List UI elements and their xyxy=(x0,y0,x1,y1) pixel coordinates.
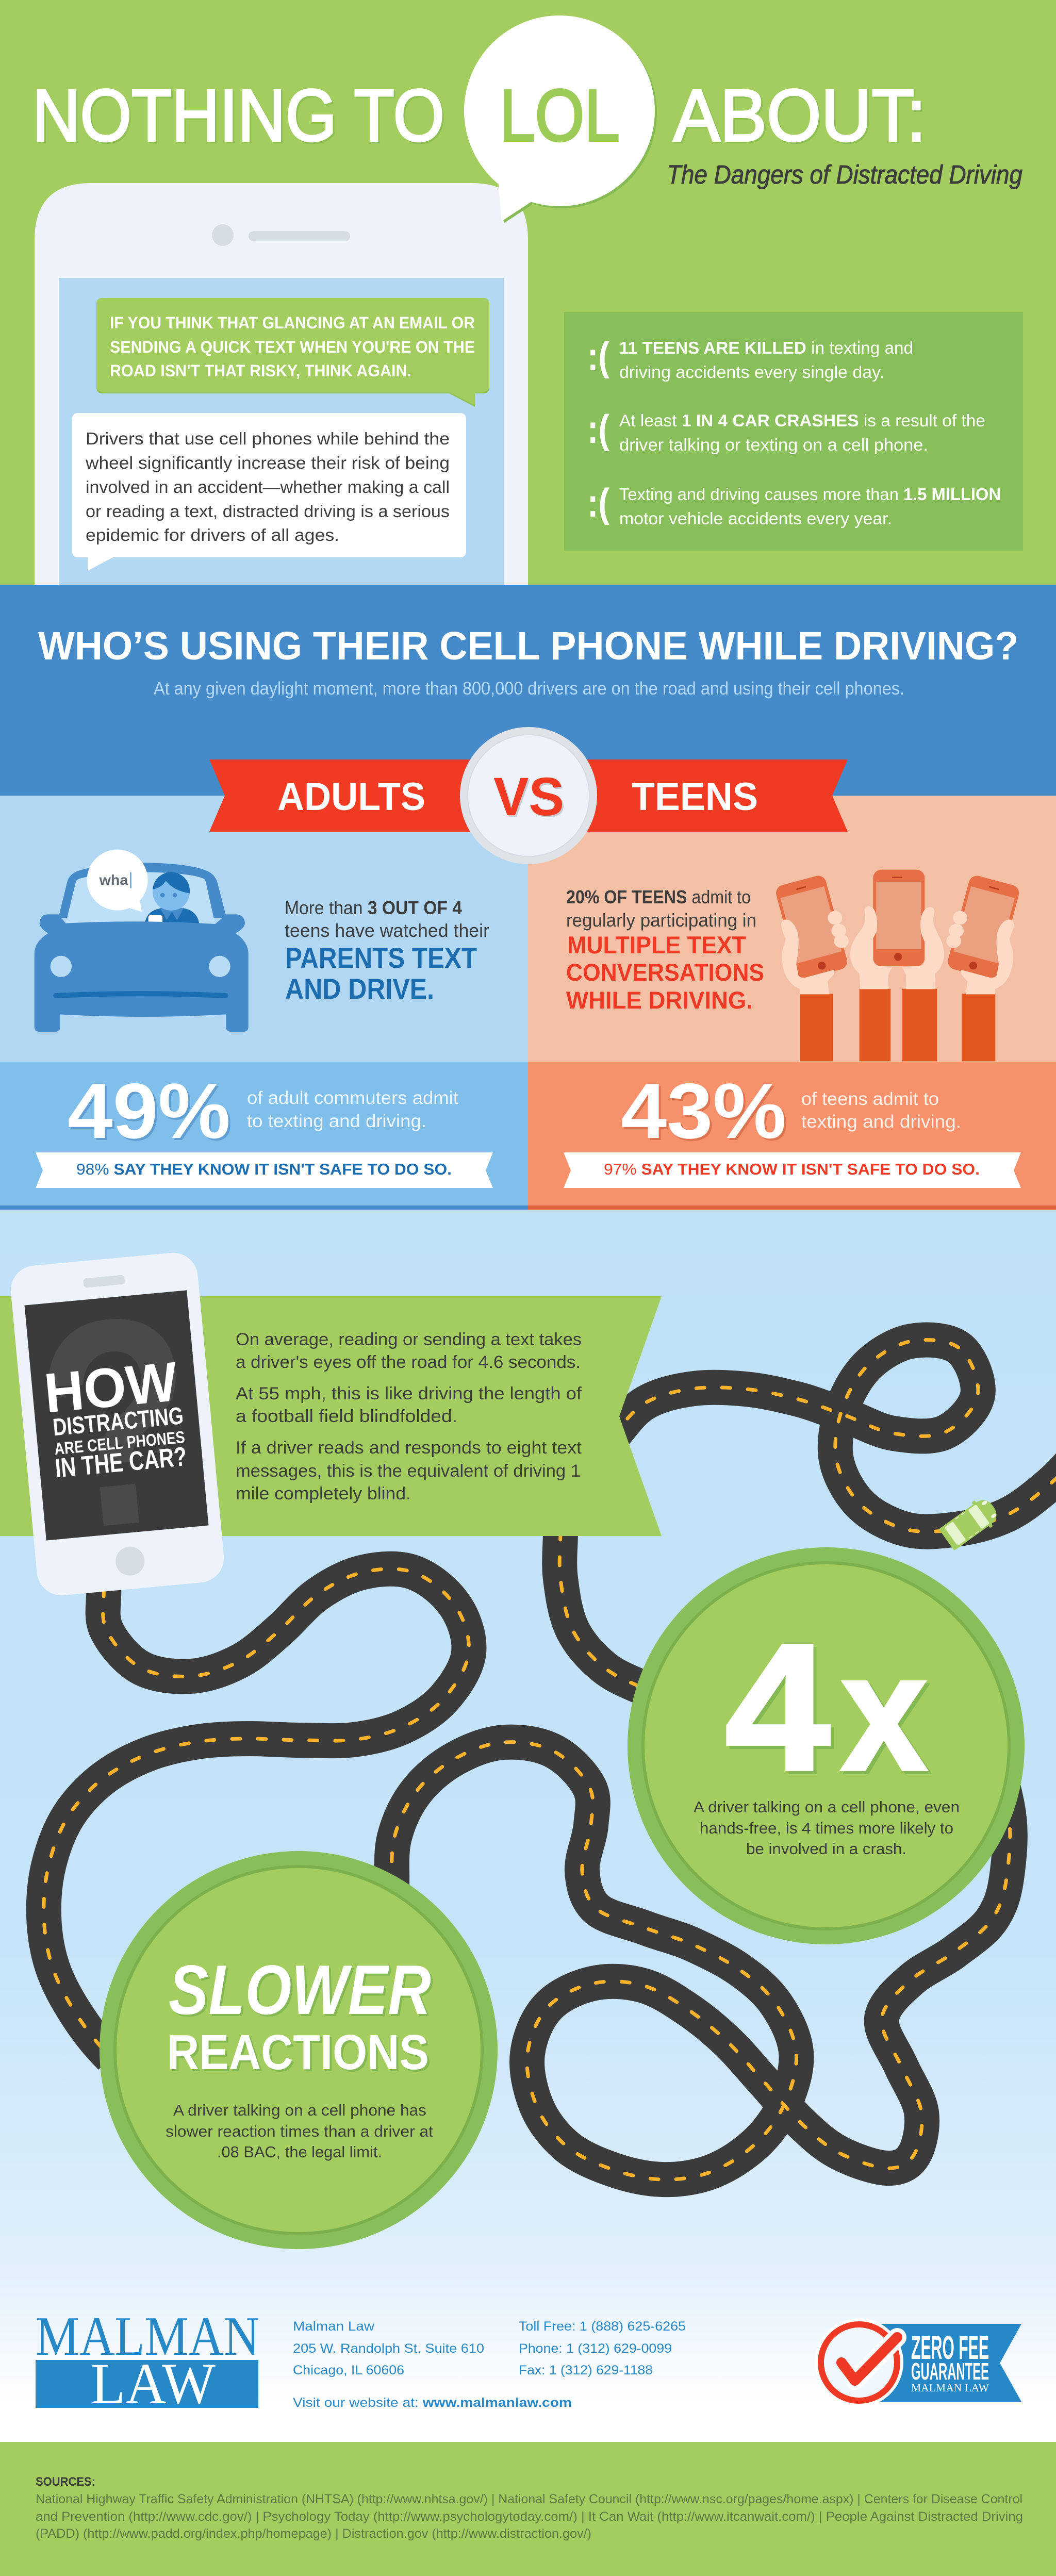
stat description: to texting and driving. xyxy=(247,1111,426,1131)
text: how distracting statistics: On average, reading or sending a text takes xyxy=(236,1330,582,1349)
icon: car with driver texting xyxy=(35,850,249,1032)
heading: slower reactions: SLOWER xyxy=(169,1951,431,2029)
bumper line xyxy=(56,994,225,996)
description: .08 BAC, the legal limit. xyxy=(217,2143,382,2161)
sources list: (PADD) (http://www.padd.org/index.php/homepage) | Distraction.gov (http://www.distraction.gov/) xyxy=(36,2527,591,2541)
car roof frame xyxy=(58,863,226,918)
icon: LOL speech bubble: LOL xyxy=(500,75,620,157)
phone home button xyxy=(114,1545,146,1577)
text: contact address: 205 W. Randolph St. Suite 610 xyxy=(293,2341,484,2356)
white message bubble: involved in an accident—whether making a call xyxy=(86,477,450,497)
sources list: National Highway Traffic Safety Administration (NHTSA) (http://www.nhtsa.gov/) | National Safety Council (http://www.nsc.org/pages/home.aspx) | Centers for Disease Control xyxy=(36,2492,1022,2506)
speech bubble xyxy=(87,850,148,912)
icon: hands holding phones xyxy=(774,870,1021,1061)
panel: teens 43 percent stat xyxy=(528,1062,1056,1210)
text: daylight moment: At any given daylight moment, more than 800,000 drivers are on the road and using their cell phones. xyxy=(154,679,904,699)
text: multiple text conversations xyxy=(566,886,764,1014)
ribbon: 98% SAY THEY KNOW IT ISN'T SAFE TO DO SO. xyxy=(76,1160,452,1178)
green message bubble: IF YOU THINK THAT GLANCING AT AN EMAIL OR xyxy=(110,313,475,332)
badge: zero fee guarantee xyxy=(815,2318,1021,2407)
VS badge: VS xyxy=(493,767,564,827)
right hand and phone xyxy=(946,874,1021,994)
heading: who's using their cell phone: WHO’S USING THEIR CELL PHONE WHILE DRIVING? xyxy=(38,624,1018,668)
heading: how distracting are cell phones in the car: ARE CELL PHONES xyxy=(54,1427,186,1458)
panel: teens xyxy=(528,796,1056,1062)
title: ABOUT: xyxy=(673,75,926,157)
logo: Malman Law xyxy=(36,2306,259,2416)
road segment: phone to slower circle xyxy=(44,1569,469,2057)
description: slower reaction times than a driver at xyxy=(166,2122,433,2140)
text: contact phone numbers: Fax: 1 (312) 629-1188 xyxy=(519,2363,653,2377)
ribbon: 97% SAY THEY KNOW IT ISN'T SAFE TO DO SO. xyxy=(604,1160,980,1178)
stat description: of adult commuters admit xyxy=(247,1088,458,1108)
heading: how distracting are cell phones in the car: DISTRACTING xyxy=(52,1401,185,1441)
white message bubble: wheel significantly increase their risk of being xyxy=(85,453,450,472)
text: how distracting statistics xyxy=(236,1330,582,1504)
text: contact address: Malman Law xyxy=(293,2319,375,2334)
green message bubble: ROAD ISN'T THAT RISKY, THINK AGAIN. xyxy=(110,361,411,380)
white message bubble: epidemic for drivers of all ages. xyxy=(86,525,339,544)
ribbon xyxy=(866,2324,1021,2402)
text: multiple text conversations: WHILE DRIVING. xyxy=(566,986,753,1014)
text: how distracting statistics: At 55 mph, this is like driving the length of xyxy=(236,1384,582,1403)
white message bubble: Drivers that use cell phones while behind the xyxy=(86,429,450,448)
phone camera xyxy=(212,224,234,246)
headlights xyxy=(51,956,72,977)
stat: teens killed: 11 TEENS ARE KILLED in texting and xyxy=(619,338,913,357)
panel: header background xyxy=(0,0,1056,588)
logo: Malman Law: LAW xyxy=(91,2352,216,2416)
stat description xyxy=(247,1088,458,1131)
car windshield xyxy=(65,872,215,924)
phone body xyxy=(9,1250,226,1597)
sources heading: SOURCES: xyxy=(36,2475,95,2489)
center phone and hands xyxy=(850,870,944,989)
icon: sad face 1: :( xyxy=(587,334,609,379)
illustration: tilted phone with how distracting heading xyxy=(9,1250,226,1597)
stat: car crashes: driver talking or texting on a cell phone. xyxy=(619,435,928,454)
white message bubble xyxy=(72,413,466,571)
green message bubble: SENDING A QUICK TEXT WHEN YOU'RE ON THE xyxy=(110,338,475,356)
description: be involved in a crash. xyxy=(746,1840,906,1858)
phone speaker xyxy=(249,231,350,241)
driver xyxy=(145,872,200,926)
text: multiple text conversations: regularly participating in xyxy=(566,910,756,931)
banner: adults vs teens: ADULTS xyxy=(277,775,425,819)
windows xyxy=(945,1522,966,1546)
description: A driver talking on a cell phone has xyxy=(173,2101,426,2119)
stat: teens killed: driving accidents every single day. xyxy=(619,362,884,382)
text: parents text and drive: AND DRIVE. xyxy=(285,972,434,1005)
text: contact address: Chicago, IL 60606 xyxy=(293,2363,404,2377)
description xyxy=(694,1798,960,1858)
heading: how distracting are cell phones in the car xyxy=(42,1350,189,1484)
icon: sad face 3: :( xyxy=(587,480,609,525)
VS badge xyxy=(460,727,597,864)
ribbon xyxy=(36,1152,493,1188)
description: A driver talking on a cell phone, even xyxy=(694,1798,960,1816)
panel: sources footer xyxy=(0,2442,1056,2576)
sources list: and Prevention (http://www.cdc.gov/) | Psychology Today (http://www.psychologytoday.com/) | It Can Wait (http://www.itcanwait.com/) | People Against Distracted Driving xyxy=(36,2509,1023,2524)
text: contact phone numbers xyxy=(519,2319,686,2377)
panel: how distracting background xyxy=(0,1210,1056,2442)
title: NOTHING TO xyxy=(32,75,444,157)
heading: how distracting are cell phones in the car: HOW xyxy=(42,1350,180,1424)
text: contact phone numbers: Toll Free: 1 (888) 625-6265 xyxy=(519,2319,686,2334)
phone screen xyxy=(59,278,504,587)
headlights xyxy=(981,1500,988,1506)
big number 4x: x xyxy=(841,1620,928,1805)
stat: car crashes xyxy=(619,411,985,454)
badge text xyxy=(911,2329,989,2394)
panel: teen crash statistics xyxy=(564,312,1023,551)
white message bubble: or reading a text, distracted driving is a serious xyxy=(86,502,450,521)
illustration: winding road xyxy=(44,1340,1056,2179)
stat description: texting and driving. xyxy=(801,1112,961,1132)
text: contact address: Visit our website at: www.malmanlaw.com xyxy=(293,2396,572,2410)
stat: teens killed xyxy=(619,338,913,382)
big number 49%: 49% xyxy=(68,1067,230,1155)
text: multiple text conversations: 20% OF TEENS admit to xyxy=(566,886,751,907)
icon: sad face 2: :( xyxy=(587,406,609,452)
panel: adults xyxy=(0,796,528,1062)
car body xyxy=(35,914,249,1032)
question mark watermark: ? xyxy=(25,1251,209,1593)
speech bubble: wha xyxy=(99,872,128,888)
big number 43%: 43% xyxy=(621,1067,786,1155)
stat: accidents xyxy=(619,485,1001,528)
panel: who's using background xyxy=(0,585,1056,796)
text: how distracting statistics: a driver's eyes off the road for 4.6 seconds. xyxy=(236,1352,581,1372)
big number 4x: 4 xyxy=(725,1607,831,1808)
callout: 4x more likely circle xyxy=(628,1547,1025,1944)
logo: Malman Law: MALMAN xyxy=(36,2306,259,2367)
text: how distracting statistics: a football field blindfolded. xyxy=(236,1407,457,1426)
text: multiple text conversations: CONVERSATIONS xyxy=(566,959,764,986)
banner: adults vs teens xyxy=(209,727,848,864)
heading: how distracting are cell phones in the car: IN THE CAR? xyxy=(54,1442,188,1483)
banner: adults vs teens: TEENS xyxy=(632,775,758,819)
text: multiple text conversations: MULTIPLE TEXT xyxy=(567,931,746,959)
description: hands-free, is 4 times more likely to xyxy=(700,1819,953,1837)
phone screen xyxy=(25,1290,208,1541)
sleeves xyxy=(800,989,995,1061)
text: how distracting statistics: messages, this is the equivalent of driving 1 xyxy=(236,1461,581,1481)
mirrors xyxy=(971,1500,993,1528)
title xyxy=(32,75,926,157)
check circle xyxy=(815,2318,903,2407)
road segment: top right loop xyxy=(611,1340,1056,1532)
left hand and phone xyxy=(774,874,849,994)
car shell xyxy=(939,1496,1001,1550)
stat: accidents: motor vehicle accidents every year. xyxy=(619,509,892,528)
stat: car crashes: At least 1 IN 4 CAR CRASHES is a result of the xyxy=(619,411,985,430)
subtitle: The Dangers of Distracted Driving xyxy=(667,160,1022,189)
check mark xyxy=(855,2337,897,2381)
ribbon xyxy=(564,1152,1021,1188)
text: how distracting statistics: mile completely blind. xyxy=(236,1484,411,1504)
panel: adults 49 percent stat xyxy=(0,1062,528,1210)
phone speaker xyxy=(83,1275,125,1288)
text: contact address xyxy=(293,2319,572,2410)
text: contact phone numbers: Phone: 1 (312) 629-0099 xyxy=(519,2341,672,2356)
big number 4x xyxy=(725,1607,928,1808)
road segment: under banner to 4x circle xyxy=(559,1531,650,1691)
phone body xyxy=(35,183,528,588)
green message bubble xyxy=(96,298,489,407)
heading: slower reactions: REACTIONS xyxy=(167,2025,429,2080)
icon: LOL speech bubble xyxy=(464,15,655,221)
road segment: lower loop xyxy=(392,1742,1010,2179)
stat description: of teens admit to xyxy=(801,1089,939,1109)
badge text: MALMAN LAW xyxy=(911,2381,989,2394)
icon: green car on road xyxy=(937,1494,1002,1553)
text: parents text and drive: More than 3 OUT OF 4 xyxy=(285,897,462,918)
text: parents text and drive xyxy=(285,897,489,1005)
illustration: large phone with chat messages xyxy=(35,183,528,588)
stat description xyxy=(801,1089,961,1132)
callout: slower reactions circle xyxy=(100,1851,498,2249)
side glass xyxy=(955,1512,979,1538)
text: parents text and drive: teens have watched their xyxy=(285,920,489,941)
text: parents text and drive: PARENTS TEXT xyxy=(285,942,477,974)
text: how distracting statistics: If a driver reads and responds to eight text xyxy=(236,1438,582,1458)
sources list xyxy=(36,2492,1023,2541)
banner: how distracting text panel xyxy=(0,1296,662,1536)
stat: accidents: Texting and driving causes more than 1.5 MILLION xyxy=(619,485,1001,504)
description xyxy=(166,2101,433,2161)
heading: slower reactions xyxy=(167,1951,431,2080)
